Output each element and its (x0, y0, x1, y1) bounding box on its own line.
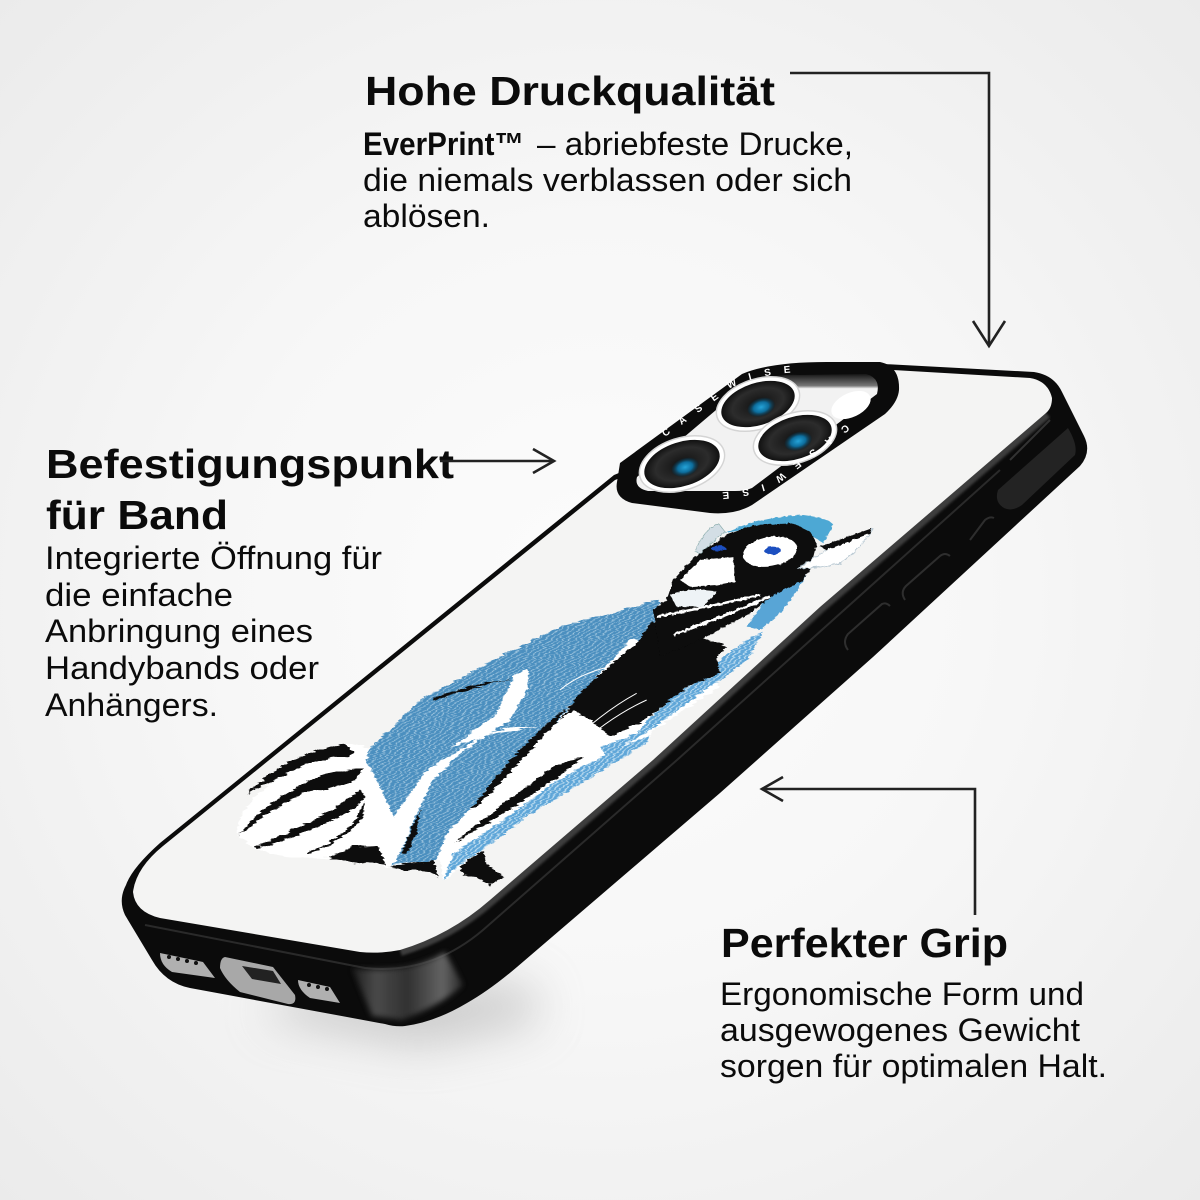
phone drop shadow (260, 985, 540, 1045)
lower thigh dark edge (402, 810, 420, 853)
heading: strap attachment (45, 441, 454, 723)
side buttons (845, 517, 994, 650)
right eye patch (741, 532, 799, 571)
wing black line (433, 678, 510, 701)
heading: print quality (363, 68, 853, 234)
heading: grip (720, 920, 1107, 1084)
left eye (711, 546, 726, 552)
right ear black tip (820, 528, 872, 550)
description: die einfache (45, 577, 233, 613)
title: Perfekter Grip (721, 920, 1008, 966)
lemur body (237, 600, 763, 885)
white fur base (237, 600, 720, 880)
description: die niemals verblassen oder sich (363, 162, 852, 198)
camera module (616, 362, 900, 514)
front leg blue fur (443, 735, 650, 880)
white band on back (450, 668, 528, 748)
chest (560, 620, 763, 757)
right eye (764, 547, 781, 555)
right ear (798, 528, 873, 568)
description: Anhängers. (45, 687, 218, 723)
leg black stripe (453, 757, 583, 843)
back face (133, 370, 1052, 953)
neck blue fur (747, 575, 807, 630)
thigh black edge (470, 707, 567, 810)
neck white stripes (657, 595, 770, 635)
case side moulding lines (145, 420, 1050, 969)
camera bumper (617, 362, 899, 513)
blue cap (723, 515, 833, 543)
casewise lettering top: CASEWISE (662, 366, 790, 436)
right foot (460, 850, 503, 885)
head shapes (653, 515, 873, 657)
description: EverPrint™ (363, 126, 524, 162)
usb slot (242, 966, 281, 984)
belly blue fur (600, 632, 763, 757)
lens right (746, 401, 844, 475)
description: ablösen. (363, 198, 490, 234)
left speaker (160, 953, 215, 978)
lemur chest fine lines (560, 667, 647, 750)
left speaker holes (167, 955, 198, 965)
description (720, 976, 1107, 1084)
camera inner wall and glass (636, 374, 878, 491)
description: Ergonomische Form und (720, 976, 1084, 1012)
case inner edge shading (400, 413, 1046, 950)
tail stripes (238, 743, 367, 855)
phone case (122, 364, 1087, 1026)
bottom corner gloss (352, 952, 463, 1020)
description: ausgewogenes Gewicht (720, 1012, 1080, 1048)
description (45, 540, 382, 723)
thigh blue fur (393, 710, 567, 865)
right speaker (298, 980, 340, 1003)
lens top (709, 367, 807, 441)
description: Handybands oder (45, 650, 319, 686)
arrow: grip (762, 777, 975, 915)
casewise lettering bottom: CASEWISE (722, 425, 849, 500)
description: – abriebfeste Drucke, (537, 126, 853, 162)
left ear (695, 523, 725, 553)
description (363, 126, 853, 234)
chin (670, 590, 717, 607)
chest black fur (560, 620, 727, 737)
title: Hohe Druckqualität (365, 68, 775, 114)
description: Anbringung eines (45, 613, 313, 649)
lemur head (653, 515, 873, 657)
upper back blue fur (367, 600, 660, 817)
arrow: print quality (790, 73, 1005, 346)
right speaker holes (307, 983, 329, 991)
case body (122, 364, 1087, 1026)
lens left (632, 426, 732, 502)
charging and speaker ports (160, 953, 340, 1004)
usb opening (220, 957, 295, 1004)
muzzle (680, 557, 735, 587)
artwork: lemur (237, 515, 873, 885)
left foot (328, 845, 387, 865)
title: Befestigungspunkt (46, 441, 454, 487)
middle foot (392, 860, 438, 877)
title: für Band (46, 492, 228, 538)
head black fur (653, 523, 817, 657)
flash (827, 385, 875, 425)
side switch recess (997, 428, 1076, 509)
title (46, 441, 454, 538)
description: Integrierte Öffnung für (45, 540, 382, 576)
arrow: strap attachment (440, 449, 554, 473)
body and tail (237, 600, 720, 885)
description: sorgen für optimalen Halt. (720, 1048, 1107, 1084)
brow line (698, 539, 752, 560)
